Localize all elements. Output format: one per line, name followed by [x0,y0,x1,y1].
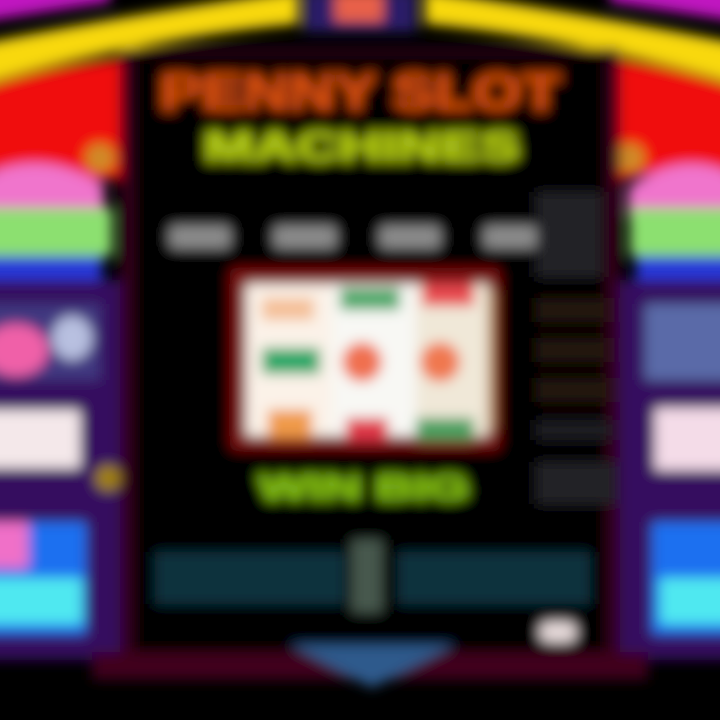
title: PENNY SLOT [160,64,560,120]
reel backgrounds [246,284,494,436]
top center emblem [304,0,416,32]
spin label: WIN BIG [259,469,469,507]
yellow arch [0,0,720,86]
left curtain [0,58,135,180]
machine cabinet [120,48,620,670]
right side panel [600,164,720,660]
bottom info panels [155,540,590,612]
slot reels [230,268,500,450]
top magenta corners [0,0,720,22]
right curtain [605,58,720,180]
stat buttons [170,226,544,248]
paytable column [536,192,616,504]
small white badge [540,622,576,642]
subtitle: MACHINES [204,125,520,169]
bottom base band [92,645,648,688]
left side panel [0,163,121,660]
reel symbols [262,284,474,440]
curtain tassels [85,143,645,173]
